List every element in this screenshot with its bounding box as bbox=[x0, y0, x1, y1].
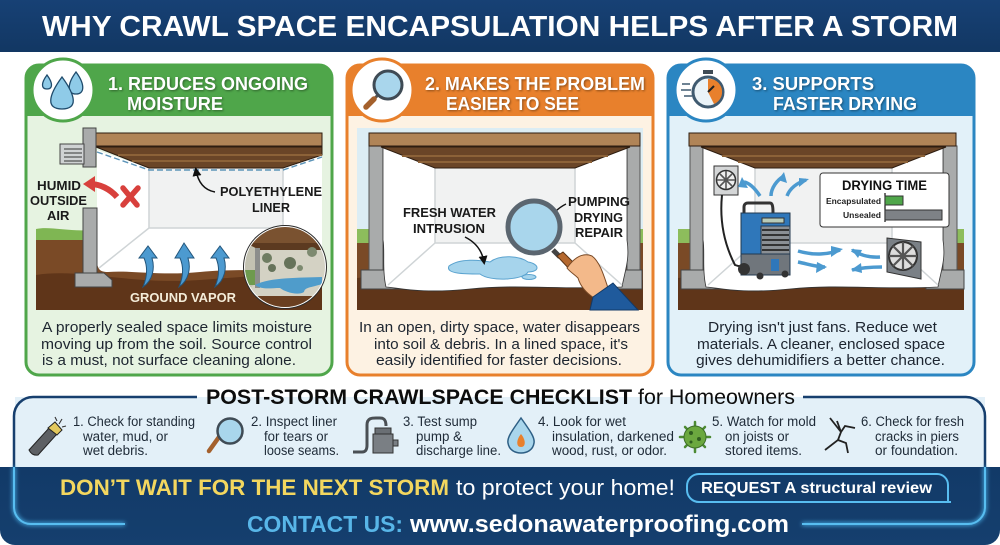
glow frame bbox=[14, 467, 985, 524]
label: fresh water intrusion bbox=[403, 205, 497, 262]
heading: panel 2: EASIER TO SEE bbox=[446, 93, 579, 114]
item 5: mold: 5. Watch for mold bbox=[712, 414, 816, 429]
item 3: sump pump bbox=[353, 414, 501, 458]
item 1: flashlight: wet debris. bbox=[82, 443, 148, 458]
label: ground vapor: GROUND VAPOR bbox=[130, 290, 237, 305]
wall fan bbox=[714, 166, 745, 266]
label: humid outside air: OUTSIDE bbox=[30, 193, 87, 208]
label: humid outside air: HUMID bbox=[37, 178, 81, 193]
item 2: magnifier bbox=[209, 414, 339, 458]
panel: reduces ongoing moisture bbox=[26, 59, 332, 375]
item 4: wet insulation drop: wood, rust, or odor. bbox=[551, 443, 667, 458]
icon: red x bbox=[123, 188, 138, 205]
dehumidifier bbox=[738, 203, 790, 280]
button: request review: REQUEST A structural review bbox=[701, 480, 933, 497]
item 2: magnifier: loose seams. bbox=[264, 443, 339, 458]
text: panel 2 description: In an open, dirty space, water disappears bbox=[359, 319, 640, 336]
contact line: www.sedonawaterproofing.com bbox=[409, 511, 789, 538]
text: panel 3 description: Drying isn't just fans. Reduce wet bbox=[708, 319, 938, 336]
item 5: mold bbox=[680, 414, 816, 458]
text: panel 2 description: into soil & debris. In a lined space, it's bbox=[374, 336, 628, 353]
heading: panel 3: FASTER DRYING bbox=[773, 93, 917, 114]
item 5: mold: on joists or bbox=[725, 429, 789, 444]
box fan bbox=[887, 238, 921, 279]
label: pumping drying repair bbox=[550, 194, 630, 240]
item 6: crack: cracks in piers bbox=[875, 429, 959, 444]
heading: checklist: POST-STORM CRAWLSPACE CHECKLIST for Homeowners bbox=[206, 386, 795, 409]
text: panel 1 description bbox=[41, 319, 312, 369]
label: polyethylene liner: LINER bbox=[252, 200, 291, 215]
text: panel 1 description: is a must, not surface cleaning alone. bbox=[42, 352, 296, 369]
chart: drying time: DRYING TIME bbox=[842, 178, 927, 193]
item 2: magnifier: 2. Inspect liner bbox=[251, 414, 337, 429]
label: humid outside air bbox=[30, 178, 87, 223]
heading: panel 2 bbox=[425, 73, 645, 114]
panel: supports faster drying bbox=[668, 59, 974, 375]
button: request review bbox=[687, 474, 951, 502]
heading: panel 1 bbox=[108, 73, 308, 114]
magnifier and hand bbox=[508, 201, 638, 310]
label: polyethylene liner bbox=[196, 170, 322, 215]
item 4: wet insulation drop bbox=[508, 414, 674, 458]
arrow: humid air blocked bbox=[90, 184, 117, 197]
title banner: WHY CRAWL SPACE ENCAPSULATION HELPS AFTER A STORM bbox=[42, 11, 958, 43]
label: humid outside air: AIR bbox=[47, 208, 70, 223]
item 1: flashlight: 1. Check for standing bbox=[73, 414, 195, 429]
item 3: sump pump: 3. Test sump bbox=[403, 414, 477, 429]
chart: drying time: Encapsulated bbox=[826, 196, 881, 206]
panel: makes the problem easier to see bbox=[347, 59, 653, 375]
text: panel 2 description bbox=[359, 319, 640, 369]
title banner bbox=[0, 0, 1000, 52]
text: panel 3 description: materials. A cleaner, enclosed space bbox=[697, 336, 945, 353]
item 4: wet insulation drop: insulation, darkened bbox=[552, 429, 674, 444]
text: panel 1 description: moving up from the soil. Source control bbox=[41, 336, 312, 353]
icon: stopwatch bbox=[675, 59, 737, 121]
text: panel 1 description: A properly sealed space limits moisture bbox=[42, 319, 312, 336]
item 2: magnifier: for tears or bbox=[264, 429, 328, 444]
text: panel 2 description: easily identified for faster decisions. bbox=[376, 352, 622, 369]
call to action: DON’T WAIT FOR THE NEXT STORM bbox=[60, 475, 449, 500]
heading: panel 1: 1. REDUCES ONGOING bbox=[108, 73, 308, 94]
item 3: sump pump: pump & bbox=[416, 429, 462, 444]
item 6: crack: 6. Check for fresh bbox=[861, 414, 964, 429]
text: panel 3 description bbox=[696, 319, 945, 369]
chart: drying time bbox=[820, 173, 949, 227]
airflow arrowheads bbox=[738, 172, 862, 273]
label: fresh water intrusion: FRESH WATER bbox=[403, 205, 497, 220]
label: fresh water intrusion: INTRUSION bbox=[413, 221, 485, 236]
contact line bbox=[247, 511, 789, 538]
call to action: to protect your home! bbox=[456, 475, 675, 500]
heading: panel 3 bbox=[752, 73, 917, 114]
label: pumping drying repair: PUMPING bbox=[568, 194, 630, 209]
item 6: crack: or foundation. bbox=[875, 443, 958, 458]
contact line: CONTACT US: bbox=[247, 511, 403, 537]
icon: water drops bbox=[32, 59, 94, 121]
item 5: mold: stored items. bbox=[725, 443, 802, 458]
item 3: sump pump: discharge line. bbox=[416, 443, 501, 458]
panel: checklist bbox=[14, 386, 985, 467]
heading: panel 3: 3. SUPPORTS bbox=[752, 73, 874, 94]
item 1: flashlight: water, mud, or bbox=[82, 429, 168, 444]
call to action bbox=[60, 475, 675, 500]
glow frame line bbox=[14, 467, 985, 524]
footer band bbox=[0, 467, 1000, 545]
chart: drying time: Unsealed bbox=[843, 210, 881, 220]
arrows: ground vapor bbox=[139, 243, 229, 287]
illustration: drying setup bbox=[678, 133, 964, 310]
label: polyethylene liner: POLYETHYLENE bbox=[220, 184, 322, 199]
illustration: sealed crawl space bbox=[30, 127, 330, 316]
text: panel 3 description: gives dehumidifiers a better chance. bbox=[696, 352, 945, 369]
icon: magnifying glass bbox=[351, 59, 413, 121]
heading: panel 2: 2. MAKES THE PROBLEM bbox=[425, 73, 645, 94]
item 6: crack bbox=[825, 414, 964, 458]
illustration: lined crawl space with puddle bbox=[357, 128, 643, 310]
inset: moldy space bbox=[243, 225, 327, 309]
label: pumping drying repair: DRYING bbox=[574, 210, 623, 225]
item 4: wet insulation drop: 4. Look for wet bbox=[538, 414, 626, 429]
airflow arrows bbox=[744, 176, 882, 270]
label: pumping drying repair: REPAIR bbox=[575, 225, 624, 240]
heading: panel 1: MOISTURE bbox=[127, 93, 223, 114]
puddle bbox=[448, 257, 537, 280]
item 1: flashlight bbox=[29, 414, 195, 458]
